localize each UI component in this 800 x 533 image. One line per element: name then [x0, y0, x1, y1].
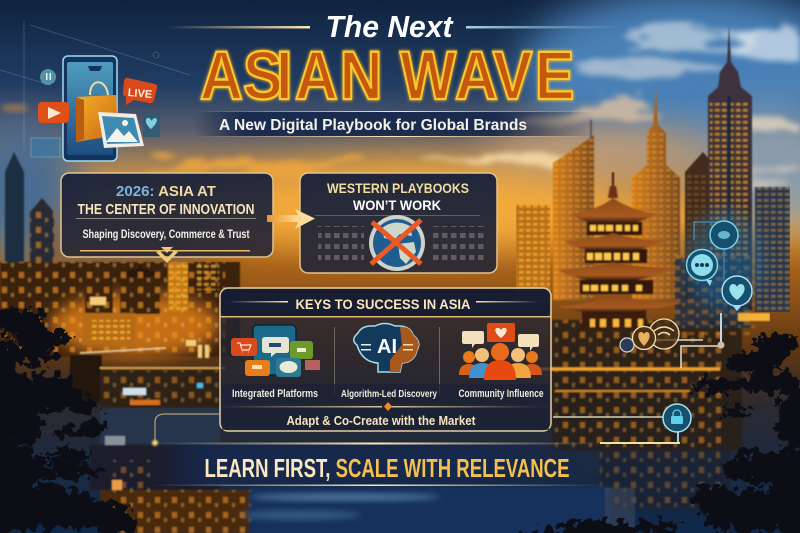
banner: learn first, scale with relevance: LEARN FIRST, SCALE WITH RELEVANCE	[204, 453, 570, 483]
panel body text: Shaping Discovery, Commerce & Trust	[82, 229, 250, 241]
icon: media circle	[40, 69, 56, 85]
chevron down	[156, 247, 178, 263]
icon: play button	[38, 102, 69, 123]
label: integrated platforms: Integrated Platforms	[232, 388, 318, 400]
icon: photo card	[98, 112, 144, 148]
banner: learn first, scale with relevance	[150, 442, 600, 486]
icon: cyan network circles	[686, 210, 763, 311]
icon: shopping bag	[76, 82, 118, 142]
icon: ai brain: AI	[377, 336, 397, 358]
icon: chat circle	[686, 250, 718, 286]
icon: ai brain	[354, 324, 419, 372]
icon: heart tile	[143, 113, 160, 137]
card: small ui tile	[31, 138, 60, 157]
icon: lock circle	[663, 404, 691, 432]
title: Asian Wave: ASIAN WAVE	[200, 37, 574, 114]
panel: 2026 asia at the center of innovation: THE CENTER OF INNOVATION	[78, 202, 254, 218]
panel: western playbooks won't work	[300, 173, 497, 273]
icon: phone with shopping bag	[31, 56, 160, 161]
panel: western playbooks won't work: WON’T WORK	[353, 197, 441, 213]
decorative title rules	[165, 26, 621, 28]
right tree silhouette	[522, 332, 800, 533]
label: algorithm-led discovery: Algorithm-Led Discovery	[341, 388, 437, 400]
title: The Next: The Next	[326, 9, 454, 44]
connector lines	[152, 222, 724, 446]
subtitle band	[195, 111, 595, 137]
left tree silhouette	[0, 308, 136, 533]
icon: heart circle	[722, 276, 752, 311]
top left tech overlay lines	[0, 20, 190, 150]
label: community influence: Community Influence	[458, 388, 544, 400]
arrow: between panels	[267, 209, 315, 229]
icon: leaf circle	[710, 221, 738, 249]
skyline: right towers	[516, 25, 790, 312]
skyline: left towers and far city	[0, 152, 770, 533]
panel heading: WESTERN PLAYBOOKS	[327, 180, 469, 196]
panel heading: KEYS TO SUCCESS IN ASIA	[296, 296, 470, 312]
icon: wifi and heart circles	[620, 319, 679, 352]
icon: community influence	[459, 323, 542, 380]
panel footer text: Adapt & Co-Create with the Market	[286, 414, 476, 428]
panel: 2026 asia at the center of innovation	[61, 173, 273, 263]
subtitle band: A New Digital Playbook for Global Brands	[219, 117, 527, 134]
panel heading: 2026: ASIA AT	[116, 184, 216, 200]
illustration: pagoda	[557, 172, 683, 330]
icon: crossed out globe	[369, 215, 425, 271]
icon: integrated platforms	[231, 325, 320, 377]
icon: live badge: LIVE	[127, 87, 153, 101]
panel: keys to success in asia	[220, 288, 551, 431]
